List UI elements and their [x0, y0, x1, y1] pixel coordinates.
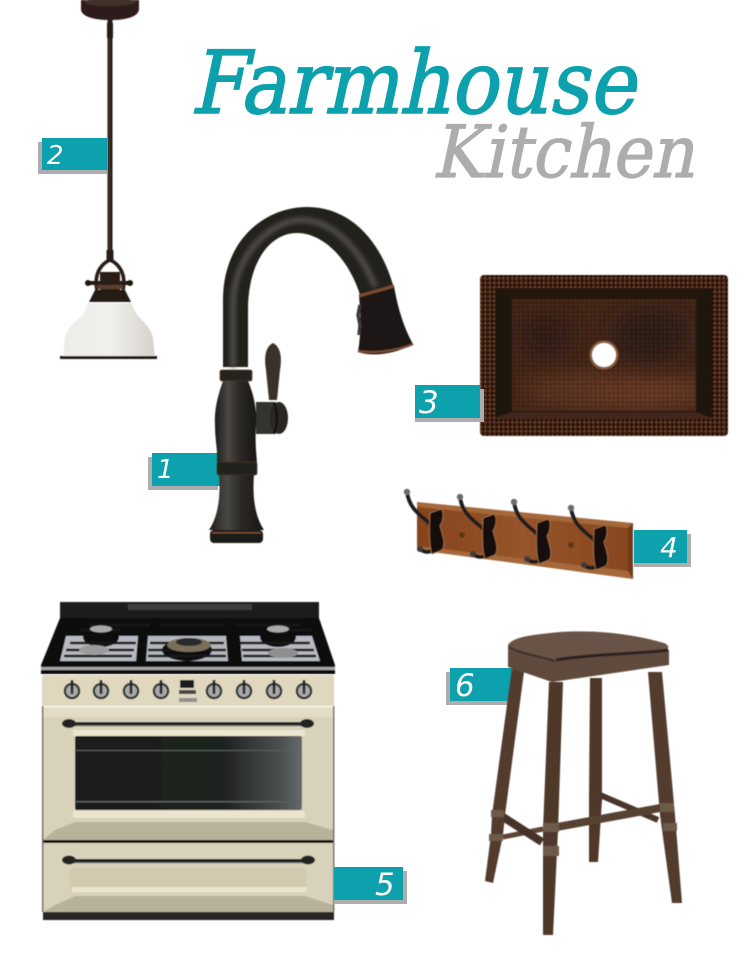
label 3	[415, 385, 484, 422]
label 6	[446, 668, 512, 705]
label 5: 5	[375, 867, 395, 903]
title: Farmhouse: Farmhouse	[186, 32, 652, 134]
label 3: 3	[419, 385, 439, 421]
sleeves	[489, 803, 677, 856]
subtitle: Kitchen: Kitchen	[428, 111, 708, 195]
back leg	[589, 678, 602, 862]
drawer	[43, 843, 333, 912]
control panel	[42, 675, 334, 706]
label 4	[634, 530, 691, 567]
hooks	[404, 489, 608, 570]
cooktop	[41, 602, 335, 674]
label 2	[38, 138, 107, 174]
stretchers	[503, 795, 660, 842]
coat hook rack	[404, 489, 633, 579]
label 1	[148, 453, 220, 490]
range stove	[41, 602, 335, 920]
label 2: 2	[47, 141, 64, 171]
seat	[508, 646, 669, 682]
sink patina	[515, 309, 710, 408]
pendant lamp	[60, 0, 157, 359]
label 1: 1	[157, 455, 174, 485]
label 5	[334, 867, 407, 904]
label 6: 6	[455, 668, 475, 704]
oven door	[43, 707, 333, 840]
kitchen sink	[480, 275, 728, 436]
faucet	[209, 207, 413, 543]
bar stool	[485, 631, 682, 935]
label 4: 4	[660, 531, 678, 564]
front leg	[543, 682, 563, 935]
left leg	[485, 668, 524, 883]
right leg	[648, 672, 682, 903]
